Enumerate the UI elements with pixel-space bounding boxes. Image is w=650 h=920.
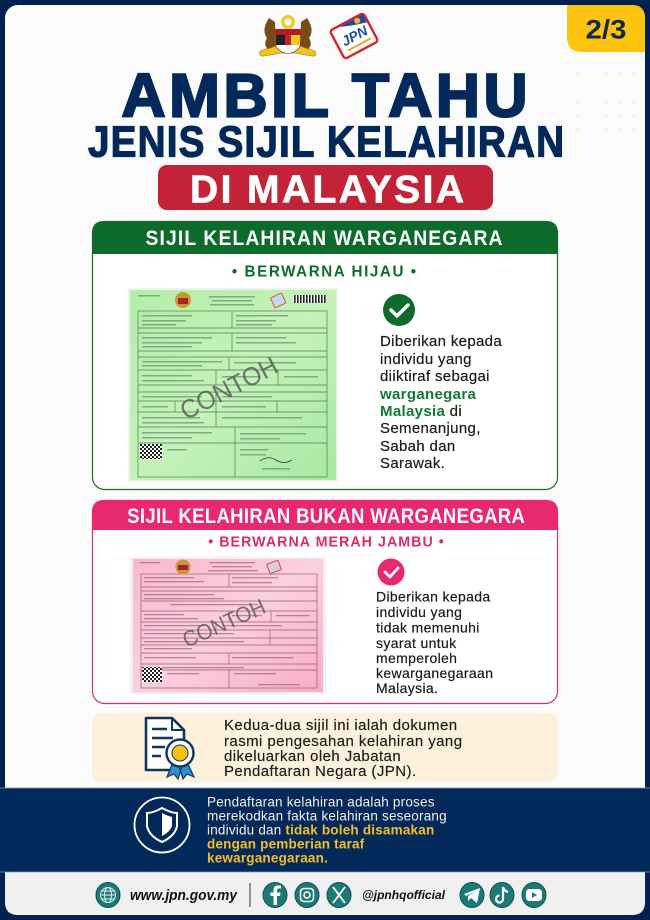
icon: youtube <box>522 882 546 908</box>
text: note: dikeluarkan oleh Jabatan <box>224 748 401 765</box>
icon: pink check <box>378 558 404 586</box>
icon: X <box>327 882 351 908</box>
icon: Malaysia coat of arms <box>260 15 316 56</box>
text: non-citizen description: Diberikan kepada <box>376 588 491 604</box>
text: non-citizen description: tidak memenuhi <box>376 620 480 636</box>
text: non-citizen description: individu yang <box>376 604 462 620</box>
text: website: www.jpn.gov.my <box>130 888 238 904</box>
text: note: Pendaftaran Negara (JPN). <box>224 763 417 780</box>
icon: telegram <box>460 882 484 908</box>
certificate sample: pink <box>130 557 326 694</box>
text: note: Kedua-dua sijil ini ialah dokumen <box>224 717 458 734</box>
panel: citizen certificate <box>92 221 558 490</box>
icon: globe <box>96 882 120 908</box>
text: citizen description: Sabah dan <box>380 438 456 455</box>
text: notice: dengan pemberian taraf <box>207 836 365 852</box>
icon: tiktok <box>490 882 514 908</box>
page badge 2/3: 2/3 <box>586 14 626 44</box>
icon: shield <box>134 798 190 852</box>
text: notice: merekodkan fakta kelahiran seseorang <box>207 808 447 824</box>
text: notice: kewarganegaraan. <box>207 850 328 866</box>
heading: non-citizen: SIJIL KELAHIRAN BUKAN WARGANEGARA <box>127 505 525 528</box>
title: AMBIL TAHU <box>122 62 528 130</box>
text: citizen description: Diberikan kepada <box>380 333 502 350</box>
text: citizen description: Semenanjung, <box>380 420 481 437</box>
certificate sample: green <box>128 288 338 482</box>
icon: JPN logo: JPN <box>339 22 371 49</box>
text: note: rasmi pengesahan kelahiran yang <box>224 733 462 750</box>
text: non-citizen description: memperoleh <box>376 650 457 666</box>
footer: links and social <box>5 873 645 915</box>
heading: citizen: SIJIL KELAHIRAN WARGANEGARA <box>146 227 503 250</box>
subheading: green: • BERWARNA HIJAU • <box>232 263 416 281</box>
text: notice: individu dan tidak boleh disamakan <box>207 822 434 838</box>
text: citizen description: individu yang <box>380 351 472 368</box>
text: handle: @jpnhqofficial <box>362 888 446 902</box>
text: notice: Pendaftaran kelahiran adalah proses <box>207 794 435 810</box>
text: non-citizen description: kewarganegaraan <box>376 665 493 681</box>
icon: green check <box>383 294 415 326</box>
text: citizen description: warganegara <box>379 386 476 403</box>
text: citizen description: Malaysia di <box>380 403 462 420</box>
certificate sample: green: CONTOH <box>175 350 283 426</box>
page badge 2/3 <box>567 5 645 52</box>
subheading: pink: • BERWARNA MERAH JAMBU • <box>208 534 444 551</box>
text: non-citizen description: Malaysia. <box>376 680 438 696</box>
title: JENIS SIJIL KELAHIRAN <box>88 116 564 166</box>
panel: navy notice band <box>0 788 650 872</box>
icon: certificate with rosette <box>146 718 194 779</box>
icon: JPN logo <box>330 13 378 59</box>
title: DI MALAYSIA <box>190 168 464 212</box>
icon: facebook <box>263 882 287 908</box>
title <box>88 62 564 212</box>
icon: instagram <box>295 882 319 908</box>
panel: note <box>92 713 558 782</box>
certificate sample: pink: CONTOH <box>179 594 269 652</box>
text: citizen description: diiktiraf sebagai <box>380 368 490 385</box>
text: citizen description: Sarawak. <box>380 455 445 472</box>
panel: non-citizen certificate <box>92 500 558 704</box>
text: non-citizen description: syarat untuk <box>376 635 457 651</box>
